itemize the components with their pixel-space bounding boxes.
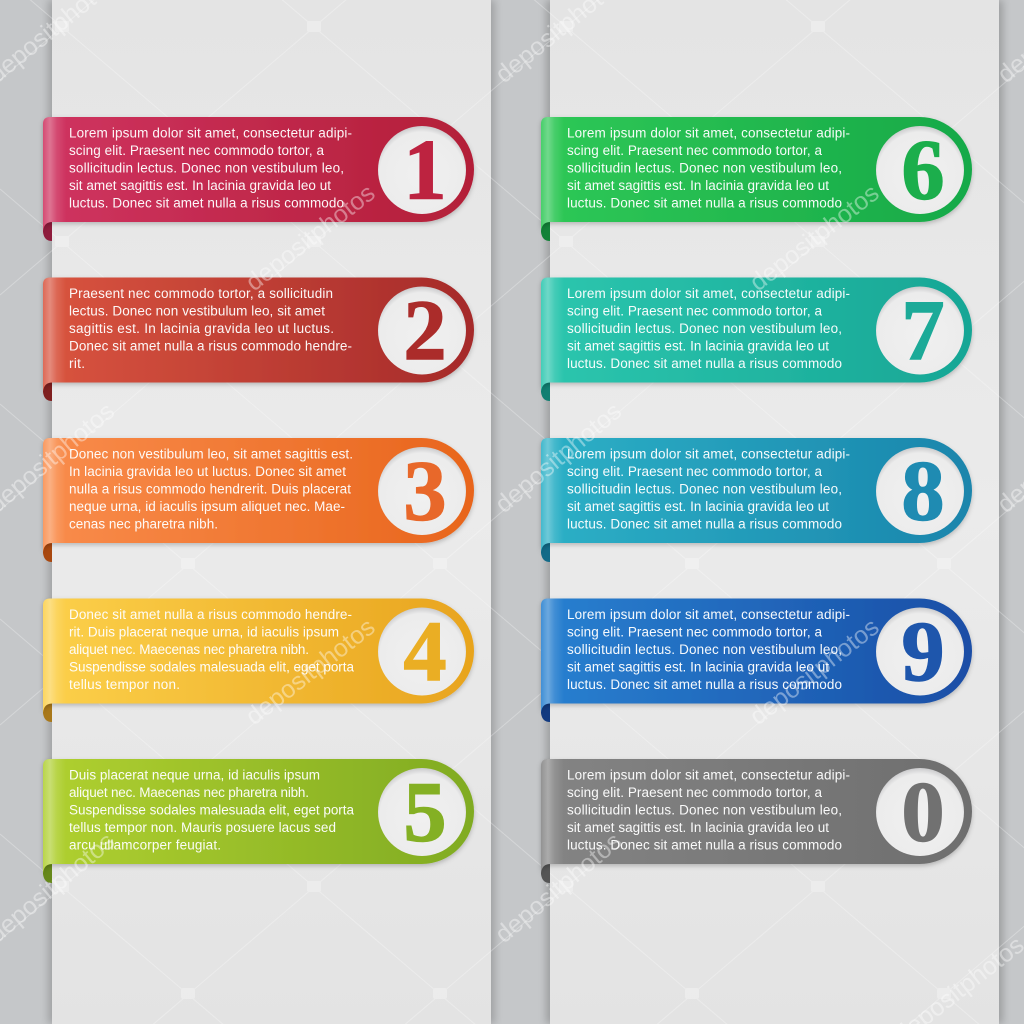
ribbon 6: luctus. Donec sit amet nulla a risus commodo — [567, 196, 842, 210]
ribbon 0: scing elit. Praesent nec commodo tortor, a — [567, 785, 822, 800]
ribbon 4: Donec sit amet nulla a risus commodo hendre- — [69, 607, 352, 622]
ribbon 8: sollicitudin lectus. Donec non vestibulum leo, — [567, 482, 842, 496]
ribbon 6: 6 — [902, 122, 944, 218]
watermarks: depositphotos — [490, 827, 627, 949]
ribbon 2: 2 — [404, 282, 446, 378]
watermarks: depositphotos — [744, 179, 884, 297]
ribbon 9: 9 — [902, 603, 944, 699]
ribbon 4: rit. Duis placerat neque urna, id iaculis ipsum — [69, 624, 339, 640]
ribbon 9: sit amet sagittis est. In lacinia gravida leo ut — [567, 660, 829, 674]
ribbon 7: luctus. Donec sit amet nulla a risus commodo — [567, 356, 842, 371]
ribbon 0: luctus. Donec sit amet nulla a risus commodo — [567, 838, 842, 852]
ribbon 3 — [43, 438, 474, 562]
ribbon 2: lectus. Donec non vestibulum leo, sit amet — [69, 304, 325, 318]
ribbon 0: sollicitudin lectus. Donec non vestibulum leo, — [567, 802, 842, 818]
ribbon 5: aliquet nec. Maecenas nec pharetra nibh. — [69, 785, 309, 800]
ribbon 4: Suspendisse sodales malesuada elit, eget porta — [69, 660, 354, 674]
ribbon 2: sagittis est. In lacinia gravida leo ut luctus. — [69, 321, 334, 336]
ribbon 5: tellus tempor non. Mauris posuere lacus sed — [69, 820, 336, 835]
ribbon 9: scing elit. Praesent nec commodo tortor, a — [567, 624, 822, 640]
ribbon 2: rit. — [69, 356, 85, 371]
ribbon 3: nulla a risus commodo hendrerit. Duis placerat — [69, 482, 351, 496]
ribbon 8: 8 — [902, 442, 944, 538]
panel: left column — [48, 0, 495, 1024]
ribbon 3: 3 — [404, 442, 446, 538]
ribbon 9: sollicitudin lectus. Donec non vestibulum leo, — [567, 642, 842, 657]
ribbon 5: Suspendisse sodales malesuada elit, eget porta — [69, 802, 354, 818]
watermarks: depositphotos — [240, 613, 380, 731]
ribbon 9 — [541, 598, 972, 722]
ribbon 3: In lacinia gravida leo ut luctus. Donec sit amet — [69, 464, 346, 479]
ribbon 8 — [541, 438, 972, 562]
ribbon 4: 4 — [404, 603, 446, 699]
panel: right column — [546, 0, 1003, 1024]
ribbon 8: luctus. Donec sit amet nulla a risus commodo — [567, 516, 842, 532]
ribbon 4: aliquet nec. Maecenas nec pharetra nibh. — [69, 642, 309, 657]
ribbon 0: 0 — [902, 764, 944, 860]
ribbon 7: sollicitudin lectus. Donec non vestibulum leo, — [567, 321, 842, 336]
ribbon 6: sollicitudin lectus. Donec non vestibulum leo, — [567, 160, 842, 176]
ribbon 6: Lorem ipsum dolor sit amet, consectetur adipi- — [567, 126, 850, 140]
ribbon 7: scing elit. Praesent nec commodo tortor, a — [567, 304, 822, 318]
ribbon 7: sit amet sagittis est. In lacinia gravida leo ut — [567, 338, 829, 354]
ribbon 1 — [43, 117, 474, 241]
ribbon 9: Lorem ipsum dolor sit amet, consectetur adipi- — [567, 607, 850, 622]
ribbon 1: 1 — [404, 122, 446, 218]
ribbon 3: Donec non vestibulum leo, sit amet sagittis est. — [69, 446, 353, 462]
ribbon 8: scing elit. Praesent nec commodo tortor, a — [567, 464, 822, 479]
ribbon 8: sit amet sagittis est. In lacinia gravida leo ut — [567, 499, 829, 514]
ribbon 0 — [541, 759, 972, 883]
watermarks: depositphotos — [490, 397, 627, 519]
ribbon 4: tellus tempor non. — [69, 677, 180, 692]
ribbon 2: Praesent nec commodo tortor, a sollicitudin — [69, 286, 333, 301]
ribbon 2 — [43, 278, 474, 401]
ribbon 2: Donec sit amet nulla a risus commodo hendre- — [69, 338, 352, 354]
ribbon 0: Lorem ipsum dolor sit amet, consectetur adipi- — [567, 768, 850, 782]
ribbon 6: sit amet sagittis est. In lacinia gravida leo ut — [567, 178, 829, 193]
ribbon 1: luctus. Donec sit amet nulla a risus commodo — [69, 196, 344, 210]
ribbon 5 — [43, 759, 474, 883]
ribbon 7 — [541, 278, 972, 401]
ribbon 8: Lorem ipsum dolor sit amet, consectetur adipi- — [567, 446, 850, 462]
ribbon 1: sollicitudin lectus. Donec non vestibulum leo, — [69, 160, 344, 176]
ribbon 5: arcu ullamcorper feugiat. — [69, 838, 221, 852]
watermarks: depositphotos — [744, 613, 884, 731]
ribbon 1: sit amet sagittis est. In lacinia gravida leo ut — [69, 178, 331, 193]
ribbon 7: Lorem ipsum dolor sit amet, consectetur adipi- — [567, 286, 850, 301]
ribbon 3: neque urna, id iaculis ipsum aliquet nec. Mae- — [69, 499, 345, 514]
ribbon 0: sit amet sagittis est. In lacinia gravida leo ut — [567, 820, 829, 835]
ribbon 9: luctus. Donec sit amet nulla a risus commodo — [567, 677, 842, 692]
ribbon 1: scing elit. Praesent nec commodo tortor, a — [69, 143, 324, 158]
ribbon 5: Duis placerat neque urna, id iaculis ipsum — [69, 768, 320, 782]
ribbon 7: 7 — [902, 282, 944, 378]
watermarks: depositphotos — [240, 179, 380, 297]
ribbon 6: scing elit. Praesent nec commodo tortor, a — [567, 143, 822, 158]
ribbon 4 — [43, 598, 474, 722]
ribbon 6 — [541, 117, 972, 241]
ribbon 3: cenas nec pharetra nibh. — [69, 516, 218, 532]
ribbon 1: Lorem ipsum dolor sit amet, consectetur adipi- — [69, 126, 352, 140]
ribbon 5: 5 — [404, 764, 446, 860]
